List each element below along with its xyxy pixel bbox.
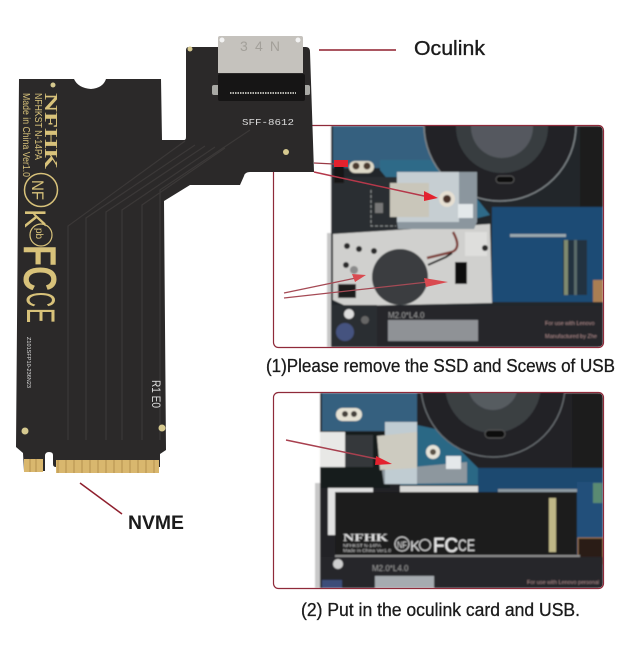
board markings: NFHK and certifications: R1 E0 (149, 380, 163, 408)
board markings: NFHK and certifications: Z101SFP10-236N23 (25, 337, 31, 388)
board markings: NFHK and certifications: NFHK (41, 93, 61, 169)
photo panel: step 1 laptop interior (272, 124, 604, 348)
photo panel: step 1 laptop interior: For use with Lenovo (545, 321, 595, 327)
board markings: NFHK and certifications: E (18, 308, 62, 323)
photo panel: step 2 laptop with card installed: For use with Lenovo personal (527, 580, 599, 586)
board outline (16, 47, 314, 471)
photo panel: step 2 laptop with card installed: M2.0*L4.0 (372, 564, 409, 573)
board markings: NFHK and certifications: FC (14, 245, 66, 291)
board markings: NFHK and certifications: NFHKST N-14PA (32, 93, 44, 160)
board markings: NFHK and certifications: K (18, 209, 51, 228)
photo panel: step 2 laptop with card installed: FC (433, 535, 458, 557)
traces (68, 130, 250, 440)
mounting holes (22, 46, 289, 434)
adapter board: M.2 to SFF-8612 PCB (14, 36, 314, 473)
photo panel: step 2 laptop with card installed: NFHK (343, 533, 388, 544)
photo panel: step 2 laptop with card installed: CE (458, 536, 475, 555)
photo panel: step 2 laptop with card installed: K (410, 538, 420, 555)
gold fingers (24, 459, 159, 473)
board markings: NFHK and certifications: C (18, 292, 62, 307)
connector: oculink port: 34N (240, 38, 280, 54)
photo panel: step 2 laptop with card installed (272, 392, 604, 590)
board markings: NFHK and certifications: pb (33, 228, 44, 240)
photo panel: step 1 laptop interior: M2.0*L4.0 (388, 311, 425, 320)
arrows: pointer lines in step 1 (284, 160, 448, 298)
photo panel: step 2 laptop with card installed: NFHKST N-14PA (343, 543, 381, 548)
board markings: NFHK and certifications: NF (28, 180, 47, 200)
photo panel: step 2 laptop with card installed: Made in China Ver1.0 (343, 548, 392, 553)
board markings: NFHK and certifications (14, 93, 163, 408)
label: NVME: NVME (128, 513, 184, 534)
photo panel: step 2 laptop with card installed: NF (397, 540, 407, 550)
caption: step 1: (1)Please remove the SSD and Scews of USB (266, 356, 615, 376)
connector: oculink port (212, 36, 310, 101)
photo panel: step 1 laptop interior: Manufactured by Zhe (545, 334, 597, 340)
arrow: pointer line in step 2 (286, 440, 392, 465)
leader line: NVME (80, 483, 122, 514)
silkscreen SFF-8612: SFF-8612 (242, 118, 294, 128)
board markings: NFHK and certifications: Made in China Ver1.0 (20, 93, 32, 177)
leader line: Oculink (319, 49, 396, 51)
label: Oculink: Oculink (414, 38, 486, 60)
caption: step 2: (2) Put in the oculink card and USB. (301, 600, 580, 620)
